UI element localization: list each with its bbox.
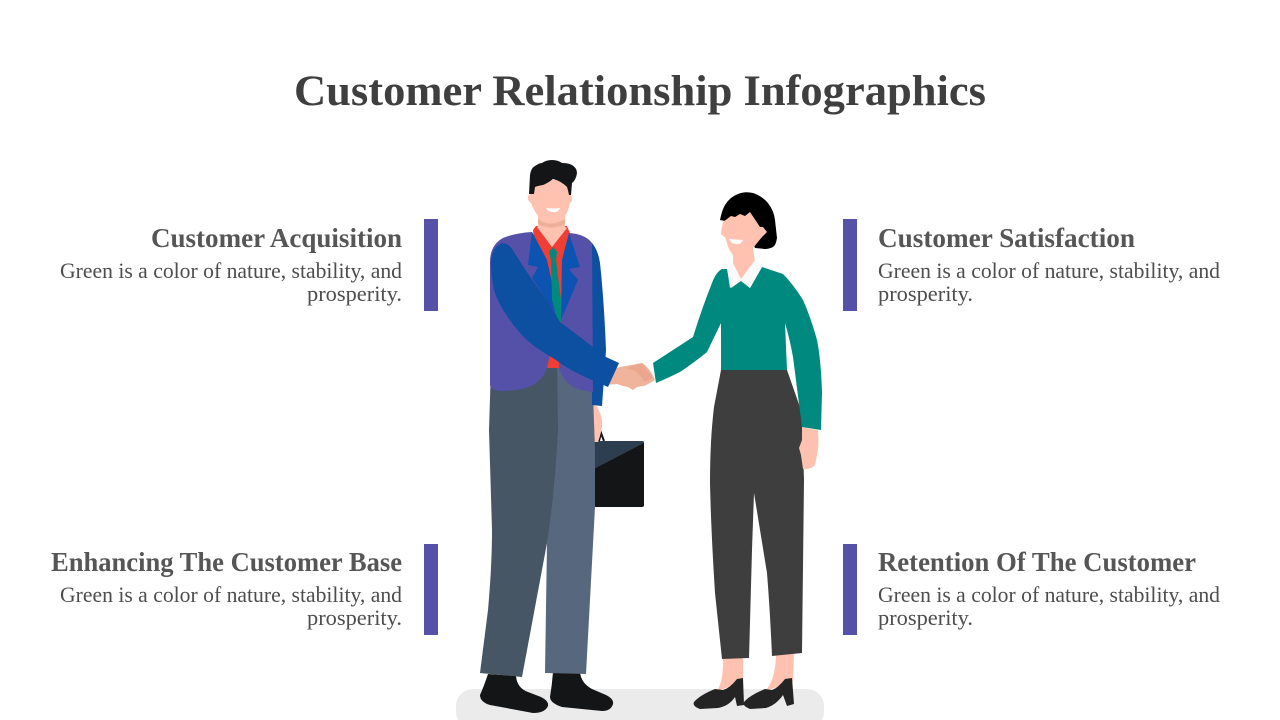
hair back [720,192,777,249]
lapels [528,232,580,320]
text block: customer satisfaction: Green is a color of nature, stability, and [878,258,1220,283]
jacket [490,232,593,392]
heading: enhancing the customer base: Enhancing The Customer Base [51,547,402,577]
text block: enhancing the customer base [60,582,402,630]
handshake [606,363,655,390]
text block: enhancing the customer base: prosperity. [307,605,402,630]
text block: retention of the customer: Green is a color of nature, stability, and [878,582,1220,607]
head [528,180,572,247]
text block: retention of the customer: prosperity. [878,605,973,630]
heading: customer acquisition: Customer Acquisition [151,223,402,253]
accent bar [424,219,438,311]
text block: enhancing the customer base: Green is a color of nature, stability, and [60,582,402,607]
tie [549,247,561,322]
trousers [710,370,804,659]
text block: customer acquisition: prosperity. [307,281,402,306]
sweater [653,267,822,430]
text block: customer satisfaction [878,258,1220,306]
accent bar [843,544,857,635]
panel: retention of the customer [843,544,1220,635]
collar [727,260,762,288]
shirt [533,226,570,368]
text block: retention of the customer [878,582,1220,630]
text block: customer acquisition: Green is a color of nature, stability, and [60,258,402,283]
heading: customer satisfaction: Customer Satisfaction [878,223,1135,253]
heading: retention of the customer: Retention Of The Customer [878,547,1196,577]
panel: enhancing the customer base [51,544,438,635]
title: Customer Relationship Infographics [294,68,986,115]
panel: customer satisfaction [843,219,1220,311]
text block: customer acquisition [60,258,402,306]
hand [799,427,818,469]
shoes [694,678,794,709]
far sleeve [592,243,606,406]
panel: customer acquisition [60,219,438,311]
smile [546,208,560,212]
illustration: businessman [480,160,655,713]
accent bar [424,544,438,635]
accent bar [843,219,857,311]
ground shadow [456,689,824,720]
face and neck [721,212,767,280]
legs [717,652,794,691]
text block: customer satisfaction: prosperity. [878,281,973,306]
trousers [480,366,595,677]
smile [729,239,743,244]
icon: briefcase [590,433,644,507]
lower hand [592,404,602,442]
neck shadow [538,219,565,228]
shoes [480,672,613,713]
hair [529,160,577,195]
front sleeve [491,243,619,387]
illustration: businesswoman [653,192,822,709]
